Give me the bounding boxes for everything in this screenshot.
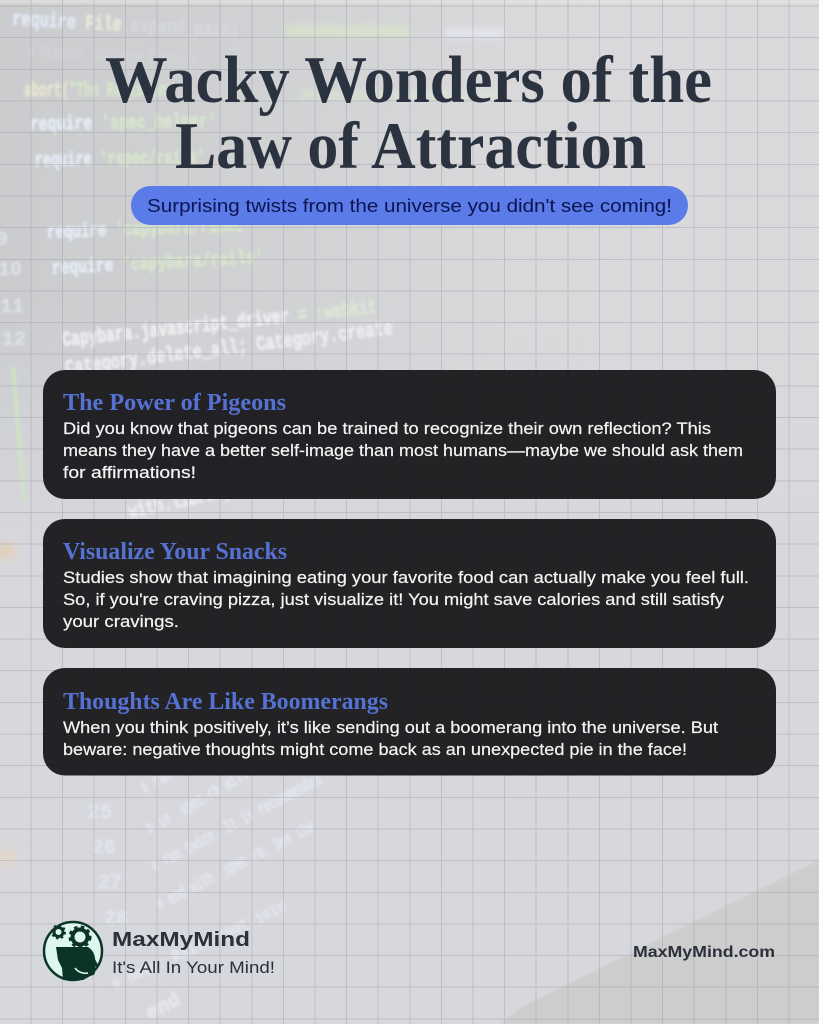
background: blurred code screen: # run twice. It is recommended xyxy=(147,769,326,877)
background: blurred code screen: 11 xyxy=(0,296,24,319)
background: blurred code screen: # run bu xyxy=(137,752,195,800)
text block: pigeons: for affirmations! xyxy=(63,464,196,482)
heading: Thoughts Are Like Boomerangs: Thoughts Are Like Boomerangs xyxy=(63,689,388,715)
text block: pigeons xyxy=(63,420,743,482)
background: blurred code screen: Capybara.javascript_driver = :webkit xyxy=(61,297,378,353)
background: blurred code screen: # end with _spec.rb. See the xyxy=(153,816,319,915)
background: blurred code screen: # Prevent database truncate xyxy=(28,42,198,71)
background: blurred code screen: 12 xyxy=(2,329,26,352)
background: blurred code screen: # in _spec.rb will xyxy=(142,764,253,840)
title: Law of Attraction xyxy=(175,109,646,183)
text block: snacks xyxy=(63,569,749,631)
brand name: MaxMyMind xyxy=(112,928,250,951)
background: blurred code screen: require 'capybara/rspec' xyxy=(46,215,252,245)
background: blurred code screen: Category.delete_all; Category.create xyxy=(64,318,394,381)
website: MaxMyMind.com xyxy=(633,944,775,961)
background: blurred code screen: require 'rspec/rails' xyxy=(35,147,205,173)
text block: boomerangs: beware: negative thoughts might come back as an unexpected pie in the face! xyxy=(63,741,687,759)
text block: pigeons: means they have a better self-image than most humans—maybe we should ask them xyxy=(63,442,743,460)
text block: snacks: your cravings. xyxy=(63,613,179,631)
text block: snacks: Studies show that imagining eating your favorite food can actually make you feel full. xyxy=(63,569,749,587)
panel: Thoughts Are Like Boomerangs xyxy=(43,668,776,776)
subtitle pill: Surprising twists from the universe you didn't see coming! xyxy=(147,195,672,216)
icon: MaxMyMind logo head with gears xyxy=(44,922,102,980)
text block: boomerangs: When you think positively, it’s like sending out a boomerang into the universe. But xyxy=(63,719,718,737)
heading: The Power of Pigeons: The Power of Pigeons xyxy=(63,390,286,416)
background: blurred code screen: 25 xyxy=(88,802,112,825)
subtitle pill xyxy=(131,186,688,225)
panel: Visualize Your Snacks xyxy=(43,519,776,648)
background: blurred code screen: require 'capybara/rails' xyxy=(51,247,264,281)
text block: snacks: So, if you're craving pizza, just visualize it! You might save calories and still satisfy xyxy=(63,591,725,609)
background: blurred code screen: 27 xyxy=(98,872,122,895)
background: blurred code screen: 26 xyxy=(92,837,116,860)
title: Wacky Wonders of the xyxy=(105,43,712,117)
text block: pigeons: Did you know that pigeons can be trained to recognize their own reflection? This xyxy=(63,420,711,438)
background: blurred code screen: with.library xyxy=(127,481,234,525)
text block: boomerangs xyxy=(63,719,718,759)
background: blurred code screen: require File.expand_path( xyxy=(12,9,241,44)
panel: The Power of Pigeons xyxy=(43,370,776,499)
title xyxy=(105,43,712,183)
background: blurred code screen: abort("The Rails env xyxy=(24,80,174,103)
tagline: It's All In Your Mind! xyxy=(112,959,275,977)
background: blurred code screen: # note: Rails.root.join xyxy=(110,898,290,995)
heading: Visualize Your Snacks: Visualize Your Snacks xyxy=(63,539,287,565)
background: blurred code screen: require 'spec_helper' xyxy=(30,111,217,137)
background: blurred code screen: 28 xyxy=(104,908,128,931)
